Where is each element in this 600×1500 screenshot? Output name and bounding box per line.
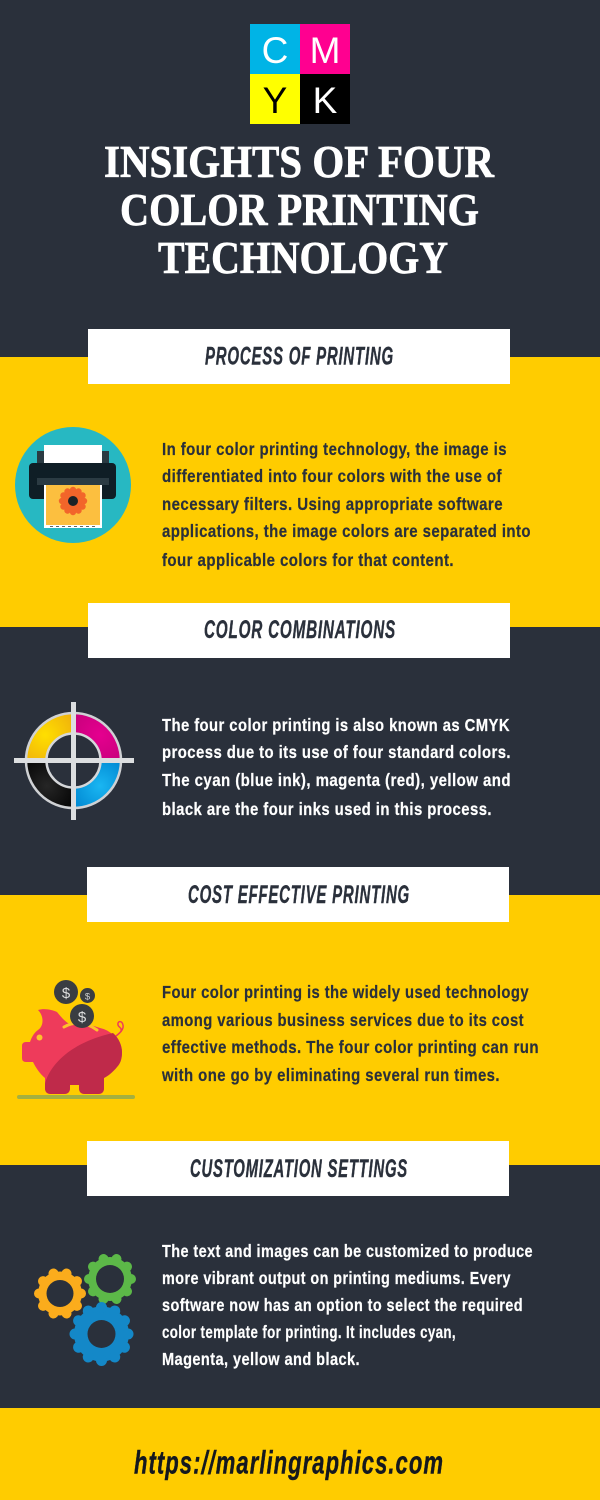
text: cost effective printing: effective methods. The four color printing can run: [162, 1037, 539, 1057]
background: dark band customization settings: [0, 1165, 600, 1408]
title: TECHNOLOGY: [158, 233, 448, 283]
panel: cost effective printing heading: [87, 867, 509, 922]
icon: piggy bank: $: [62, 985, 71, 1002]
footer url: https://marlingraphics.com: [134, 1444, 444, 1480]
panel: customization settings heading: [87, 1141, 509, 1196]
title: [104, 137, 494, 283]
text: color combinations: The four color printing is also known as CMYK: [162, 715, 510, 735]
panel: color combinations heading: COLOR COMBINATIONS: [204, 616, 396, 644]
text: process of printing: In four color printing technology, the image is: [162, 439, 507, 459]
text: process of printing: applications, the image colors are separated into: [162, 521, 531, 541]
icon: registration target: [14, 702, 134, 820]
panel: color combinations heading: [88, 603, 510, 658]
icon: piggy bank: $: [85, 992, 91, 1002]
background: yellow footer band: [0, 1408, 600, 1500]
text: cost effective printing: with one go by eliminating several run times.: [161, 1065, 500, 1085]
text: customization settings: color template for printing. It includes cyan,: [162, 1322, 456, 1342]
text: color combinations: [162, 715, 511, 819]
logo: CMYK squares: M: [310, 30, 340, 71]
icon: printer: [15, 427, 131, 543]
text: customization settings: software now has an option to select the required: [162, 1295, 523, 1315]
background: yellow band cost effective printing: [0, 895, 600, 1165]
text: color combinations: black are the four inks used in this process.: [162, 799, 492, 819]
text: process of printing: four applicable colors for that content.: [162, 550, 454, 570]
panel: customization settings heading: CUSTOMIZATION SETTINGS: [190, 1155, 408, 1183]
background: yellow band process of printing: [0, 357, 600, 627]
text: customization settings: more vibrant output on printing mediums. Every: [162, 1268, 511, 1288]
text: process of printing: necessary filters. Using appropriate software: [162, 494, 503, 514]
logo: CMYK squares: K: [313, 80, 338, 121]
text: customization settings: The text and images can be customized to produce: [162, 1241, 533, 1261]
title: INSIGHTS OF FOUR: [104, 137, 494, 187]
icon: piggy bank: $: [78, 1009, 87, 1026]
text: process of printing: differentiated into four colors with the use of: [162, 466, 502, 486]
icon: piggy bank: [17, 980, 135, 1099]
text: process of printing: [162, 439, 531, 570]
text: customization settings: [162, 1241, 533, 1369]
text: cost effective printing: [161, 982, 539, 1085]
background: dark band color combinations: [0, 627, 600, 895]
text: cost effective printing: Four color printing is the widely used technology: [162, 982, 529, 1002]
logo: CMYK squares: Y: [263, 80, 287, 121]
text: color combinations: process due to its use of four standard colors.: [162, 742, 511, 762]
icon: gears: [34, 1253, 136, 1366]
title: COLOR PRINTING: [120, 185, 479, 235]
text: color combinations: The cyan (blue ink), magenta (red), yellow and: [162, 770, 511, 790]
panel: process of printing heading: [88, 329, 510, 384]
text: cost effective printing: among various business services due to its cost: [162, 1010, 524, 1030]
panel: process of printing heading: PROCESS OF PRINTING: [205, 342, 394, 370]
text: customization settings: Magenta, yellow and black.: [162, 1349, 360, 1369]
panel: cost effective printing heading: COST EFFECTIVE PRINTING: [188, 881, 410, 909]
logo: CMYK squares: [250, 24, 350, 124]
background: dark header: [0, 0, 600, 357]
logo: CMYK squares: C: [262, 30, 288, 71]
